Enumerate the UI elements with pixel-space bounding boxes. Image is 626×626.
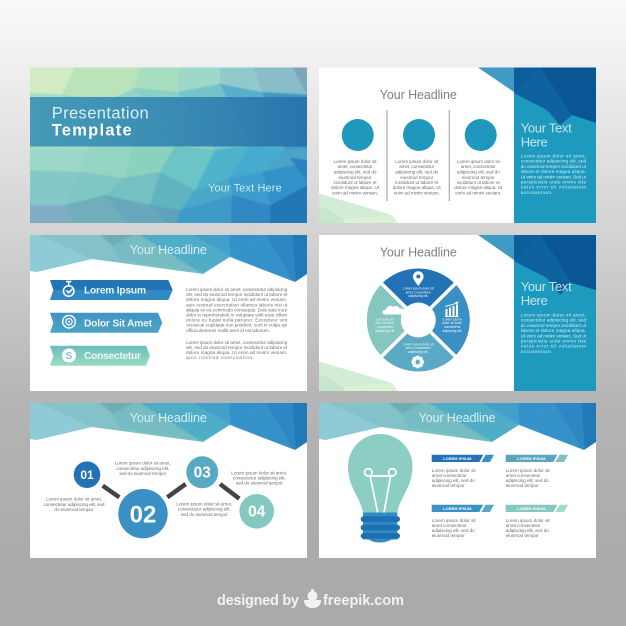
text: step 01: do eiusmod tempor	[54, 507, 94, 512]
side paragraph: consectetur adipiscing elit, sed	[521, 318, 586, 323]
title band	[30, 97, 307, 146]
paragraph 1: dolore magna aliqua. Ut enim ad minim veniam,	[186, 297, 287, 302]
side paragraph: Ut enim ad minim veniam. Sed ut	[521, 333, 587, 338]
panel: ribbon list slide	[20, 225, 317, 391]
low-poly background	[30, 68, 307, 223]
headline: Your Headline	[418, 411, 496, 425]
header polygons	[20, 393, 317, 463]
text: top segment	[403, 286, 434, 298]
side paragraph: do eiusmod tempor incididunt ut	[521, 164, 587, 169]
paragraph 2: dolore magna aliqua. Ut enim ad minim veniam,	[186, 350, 287, 355]
icon: freepik mascot	[304, 589, 321, 608]
text column 2: incididunt ut labore et	[395, 180, 439, 185]
footer credit	[217, 589, 404, 609]
text: bottom segment	[403, 342, 434, 354]
text column 3: Lorem ipsum dolor sit	[457, 159, 500, 164]
label block 3	[432, 505, 494, 538]
ribbon: Consectetur: Consectetur	[84, 351, 141, 362]
title: Presentation Template	[52, 104, 149, 140]
text: right segment	[442, 318, 462, 333]
paragraph 2: quis nostrud exercitation.	[186, 355, 254, 360]
text: step 02: sed do eiusmod tempor	[119, 471, 167, 476]
paragraph 2: elit, sed do eiusmod tempor incididunt ut labore et	[186, 345, 288, 350]
footer credit: freepik.com	[323, 593, 404, 609]
text: step 01: Lorem ipsum dolor sit amet,	[46, 496, 102, 502]
headline: Your Headline	[130, 411, 207, 425]
title: Presentation Template: Template	[52, 122, 132, 140]
segment: left	[367, 284, 418, 356]
circles	[342, 119, 497, 151]
side paragraph: accusantium.	[521, 190, 553, 195]
label block 3: eiusmod tempor	[432, 533, 465, 538]
step 02: 02	[130, 501, 156, 528]
label block 3: adipiscing elit, sed do	[432, 528, 475, 533]
side panel	[478, 235, 596, 391]
side paragraph: labore et dolore magna aliqua.	[521, 169, 586, 174]
label block 1: eiusmod tempor	[432, 483, 465, 488]
text: step 02	[115, 460, 171, 476]
text column 1: eiusmod tempor	[338, 175, 372, 180]
segment: right	[418, 284, 470, 356]
headline: Your Headline	[380, 246, 457, 260]
text: step 03: consectetur adipiscing elit,	[178, 506, 231, 512]
donut chart	[367, 269, 470, 371]
text column 2: dolore magna aliqua. Ut	[393, 185, 441, 190]
text: step 03: sed do eiusmod tempor	[181, 512, 228, 517]
panel: donut slide	[319, 235, 596, 391]
label block 4: eiusmod tempor	[506, 533, 539, 538]
text: step 01: consectetur adipiscing elit, sed	[44, 502, 105, 507]
ribbon: Dolor Sit Amet: Dolor Sit Amet	[84, 318, 153, 329]
step 02	[118, 489, 168, 538]
connectors	[103, 484, 239, 499]
panel: title slide	[30, 68, 307, 223]
text: right segment: consectetur	[444, 325, 461, 329]
text: top segment: Lorem ipsum dolor sit	[403, 286, 434, 290]
icon: dollar coin: S	[66, 351, 73, 362]
step 01	[74, 461, 100, 488]
side paragraph: consectetur adipiscing elit, sed	[521, 159, 586, 164]
icon: target	[63, 315, 75, 328]
text: step 04: consectetur adipiscing elit,	[233, 476, 286, 480]
side heading	[521, 279, 572, 308]
ribbon: Lorem Ipsum: Lorem Ipsum	[84, 286, 146, 297]
text: right segment: Lorem ipsum	[443, 318, 462, 322]
label block 3: amet consectetur	[432, 523, 467, 528]
text column 1: enim ad minim veniam,	[332, 190, 378, 195]
title: Presentation Template: Presentation	[52, 104, 149, 122]
label block 4: LOREM IPSUM	[517, 506, 546, 511]
paragraph 2	[186, 340, 288, 360]
step 04	[239, 494, 274, 529]
segment: top	[382, 269, 455, 320]
text: top segment: amet, consectetur	[406, 290, 432, 294]
icon: cloud	[383, 306, 405, 314]
panel: light bulb slide	[309, 393, 606, 558]
paragraph 2: Lorem ipsum dolor sit amet, consectetur adipiscing	[186, 340, 288, 345]
text: step 04: sed do eiusmod tempor	[236, 480, 283, 486]
text column 2: enim ad minim veniam,	[394, 190, 440, 195]
text column 2	[393, 159, 441, 195]
headline: Your Headline	[380, 88, 457, 102]
label block 1: Lorem ipsum dolor sit	[432, 468, 476, 473]
paragraph 1: aliquip ex ea commodo consequat. Duis aute irure	[186, 307, 288, 312]
step 03: 03	[194, 465, 211, 482]
header polygons	[20, 225, 317, 295]
text column 3: amet, consectetur	[461, 164, 496, 169]
text column 2: eiusmod tempor	[400, 175, 434, 180]
text column 3: adipiscing elit, sed do	[457, 170, 500, 174]
text: left segment: Lorem ipsum	[376, 318, 395, 322]
text: left segment: dolor sit amet,	[375, 321, 395, 325]
label block 2: amet consectetur	[506, 473, 541, 478]
label block 1: adipiscing elit, sed do	[432, 478, 475, 483]
panel: numbered steps slide	[20, 393, 317, 558]
text: step 02: Lorem ipsum dolor sit amet,	[115, 460, 171, 466]
side paragraph: perspiciatis unde omnis iste	[521, 338, 586, 344]
paragraph 1: dolor in reprehenderit in voluptate velit esse cillum	[186, 312, 287, 318]
label block 4	[506, 505, 568, 538]
side panel	[478, 68, 596, 223]
text: step 04: Lorem ipsum dolor sit amet,	[231, 470, 287, 476]
text: step 04	[231, 470, 287, 486]
panel: three circles slide	[319, 68, 596, 223]
paragraph 1: quis nostrud exercitation ullamco laboris nisi ut	[186, 302, 288, 307]
label block 2	[506, 455, 568, 488]
side paragraph: natus error sit voluptatem	[521, 185, 586, 190]
side paragraph: do eiusmod tempor incididunt ut	[521, 323, 587, 328]
side heading: Your Text	[521, 279, 572, 294]
side paragraph: natus error sit voluptatem	[521, 344, 586, 349]
step 04: 04	[248, 504, 266, 521]
label block 3: Lorem ipsum dolor sit	[432, 518, 476, 523]
text: left segment: adipiscing elit.	[375, 329, 395, 333]
side paragraph: Ut enim ad minim veniam. Sed ut	[521, 174, 587, 179]
ribbon: Lorem Ipsum	[50, 280, 173, 300]
text: left segment	[375, 318, 395, 333]
label block 2: eiusmod tempor	[506, 483, 539, 488]
text: step 03: Lorem ipsum dolor sit amet,	[176, 502, 232, 506]
label block 2: Lorem ipsum dolor sit	[506, 468, 550, 473]
text: step 01	[44, 496, 105, 512]
icon: stopwatch	[63, 282, 74, 296]
paragraph 1: dolore eu fugiat nulla pariatur. Excepteur sint	[186, 318, 288, 323]
text column 3: incididunt ut labore et	[457, 180, 500, 185]
text column 3: enim ad minim veniam,	[455, 190, 501, 195]
label block 4: Lorem ipsum dolor sit	[506, 518, 550, 523]
text column 3: dolore magna aliqua. Ut	[454, 185, 503, 190]
green corner decoration	[319, 194, 398, 223]
label block 2: LOREM IPSUM	[517, 456, 546, 461]
step 03	[186, 456, 218, 488]
icon: gear	[411, 356, 424, 368]
text column 1: Lorem ipsum dolor sit	[334, 159, 377, 164]
text: bottom segment: amet, consectetur	[406, 346, 432, 350]
side paragraph: perspiciatis unde omnis iste	[521, 180, 586, 184]
ribbon: Consectetur	[50, 346, 150, 366]
icon: map pin	[413, 271, 424, 286]
label block 1: amet consectetur	[432, 473, 467, 478]
icon: bar chart	[445, 302, 458, 317]
text: right segment: dolor sit amet,	[442, 321, 462, 325]
paragraph 1	[186, 287, 288, 333]
label block 3: LOREM IPSUM	[443, 506, 472, 511]
text column 2: adipiscing elit, sed do	[395, 170, 439, 174]
text: left segment: consectetur	[377, 325, 394, 329]
side heading: Here	[521, 135, 548, 150]
text: step 02: consectetur adipiscing elit,	[116, 466, 169, 471]
text column 1: amet, consectetur	[338, 164, 373, 169]
paragraph 1: elit, sed do eiusmod tempor incididunt ut labore et	[186, 292, 288, 297]
headline: Your Headline	[130, 243, 207, 257]
column dividers	[387, 110, 449, 201]
text: bottom segment: adipiscing elit.	[408, 350, 428, 354]
header polygons	[309, 393, 606, 463]
paragraph 1: Lorem ipsum dolor sit amet, consectetur adipiscing	[186, 287, 288, 292]
label block 4: adipiscing elit, sed do	[506, 528, 549, 533]
side heading	[521, 121, 572, 150]
text column 1: adipiscing elit, sed do	[334, 170, 377, 174]
icon: light bulb	[348, 434, 412, 543]
side paragraph	[521, 154, 587, 195]
footer credit: designed by	[217, 593, 299, 609]
text column 2: amet, consectetur	[399, 164, 435, 169]
text: Your Text Here: Your Text Here	[208, 183, 282, 195]
side heading: Here	[521, 293, 548, 308]
text: step 03	[176, 502, 232, 517]
label block 2: adipiscing elit, sed do	[506, 478, 549, 483]
segment: bottom	[382, 320, 455, 371]
paragraph 1: occaecat cupidatat non proident, sunt in culpa qui	[186, 323, 287, 328]
text column 1: incididunt ut labore et	[334, 180, 377, 185]
text column 1	[331, 159, 380, 195]
text: top segment: adipiscing elit.	[408, 294, 428, 298]
text column 1: dolore magna aliqua. Ut	[331, 185, 380, 190]
side paragraph: Lorem ipsum dolor sit amet,	[521, 154, 586, 158]
side paragraph: Lorem ipsum dolor sit amet,	[521, 312, 586, 318]
label block 1	[432, 455, 494, 488]
text: right segment: adipiscing elit.	[442, 329, 462, 333]
text: bottom segment: Lorem ipsum dolor sit	[403, 342, 434, 346]
text column 3	[454, 159, 503, 195]
step 01: 01	[80, 468, 94, 482]
text column 3: eiusmod tempor	[462, 175, 495, 180]
side paragraph	[521, 312, 587, 354]
green corner decoration	[319, 362, 398, 391]
side paragraph: accusantium.	[521, 349, 553, 354]
text column 2: Lorem ipsum dolor sit	[395, 159, 439, 164]
ribbon: Dolor Sit Amet	[50, 313, 162, 333]
label block 4: amet consectetur	[506, 523, 541, 528]
side heading: Your Text	[521, 121, 572, 136]
side paragraph: labore et dolore magna aliqua.	[521, 328, 586, 333]
paragraph 1: officia deserunt mollit anim id est laborum.	[186, 328, 270, 333]
label block 1: LOREM IPSUM	[443, 456, 472, 461]
